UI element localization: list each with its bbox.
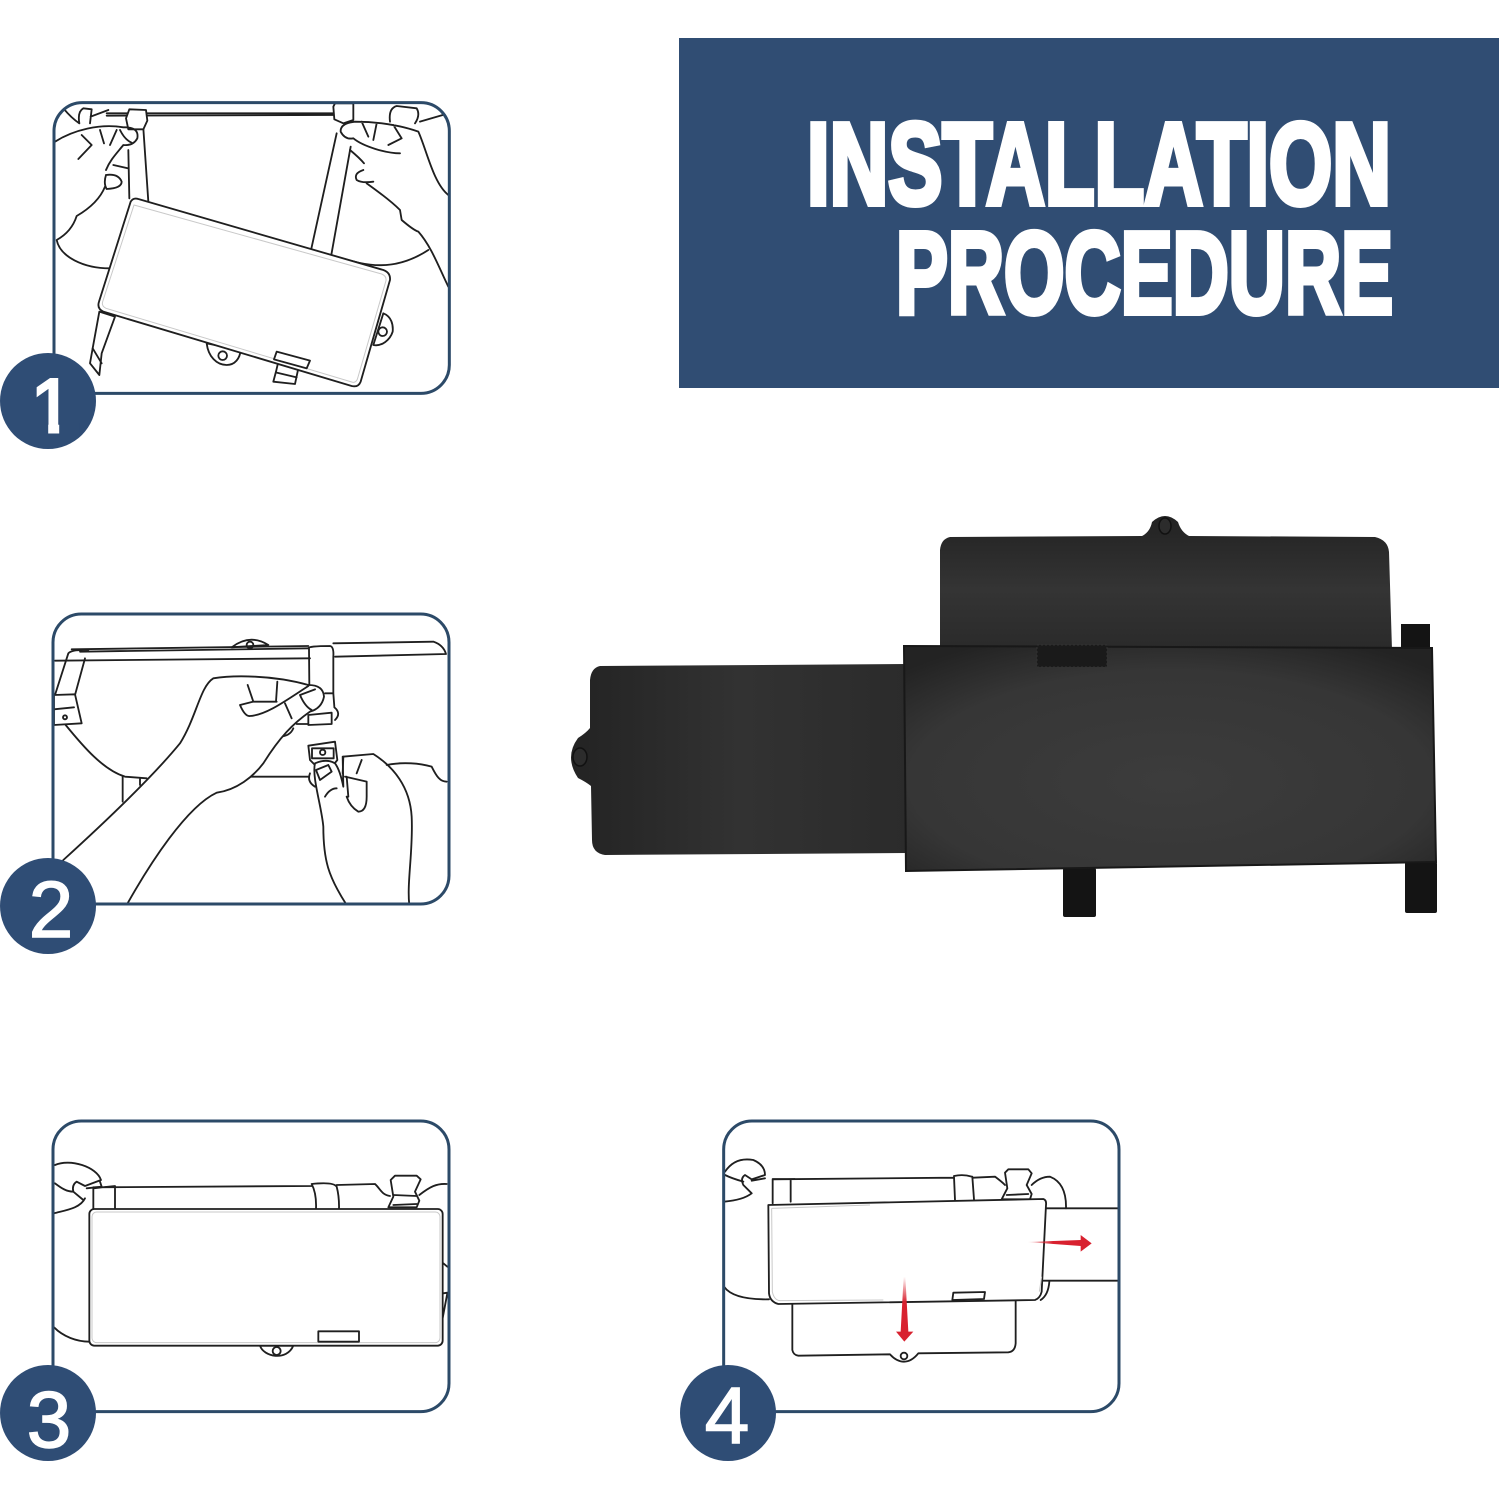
step 2 panel	[33, 614, 449, 905]
illustration: visor top and straps	[54, 640, 446, 802]
step 3 number badge	[0, 1365, 96, 1464]
step 1 number badge: 1	[31, 364, 73, 449]
step 2 number badge	[0, 858, 96, 954]
illustration: buckle and second hand	[308, 742, 447, 905]
arrow: pull right	[1027, 1235, 1092, 1252]
illustration: pull-out bottom panel	[792, 1298, 1016, 1362]
main visor body	[904, 646, 1436, 871]
upper panel rivet	[1159, 518, 1171, 534]
step 4 number badge: 4	[705, 1371, 749, 1460]
left extension panel	[571, 664, 908, 855]
step 1 number badge	[0, 353, 96, 449]
left panel rivet	[573, 748, 587, 766]
upper extension panel	[940, 516, 1392, 650]
illustration: sun visor flat	[89, 1209, 443, 1346]
step 4 panel	[724, 1121, 1119, 1412]
velcro tab	[1037, 645, 1107, 667]
title banner	[679, 38, 1499, 388]
illustration: right hand	[333, 106, 448, 287]
illustration: left hand	[55, 108, 138, 268]
bottom straps	[1063, 862, 1437, 917]
illustration: pull-out side panel	[1041, 1208, 1119, 1300]
illustration: visor mount and clips	[724, 1159, 1066, 1299]
illustration: sun visor tilted	[90, 199, 393, 386]
arrow: pull down	[896, 1277, 913, 1342]
illustration: top bar and straps	[107, 103, 353, 257]
step 1 panel	[54, 103, 449, 393]
product photo: extended black sun visor	[571, 516, 1437, 917]
back strap top right	[1401, 624, 1430, 650]
step 3 number badge: 3	[27, 1375, 71, 1464]
illustration: sun visor	[768, 1199, 1046, 1304]
illustration: visor mount and clips	[54, 1163, 447, 1356]
illustration: reaching arm and hand	[33, 676, 324, 905]
step 2 number badge: 2	[29, 865, 73, 954]
step 3 panel	[53, 1121, 449, 1412]
step 4 number badge	[680, 1365, 776, 1461]
